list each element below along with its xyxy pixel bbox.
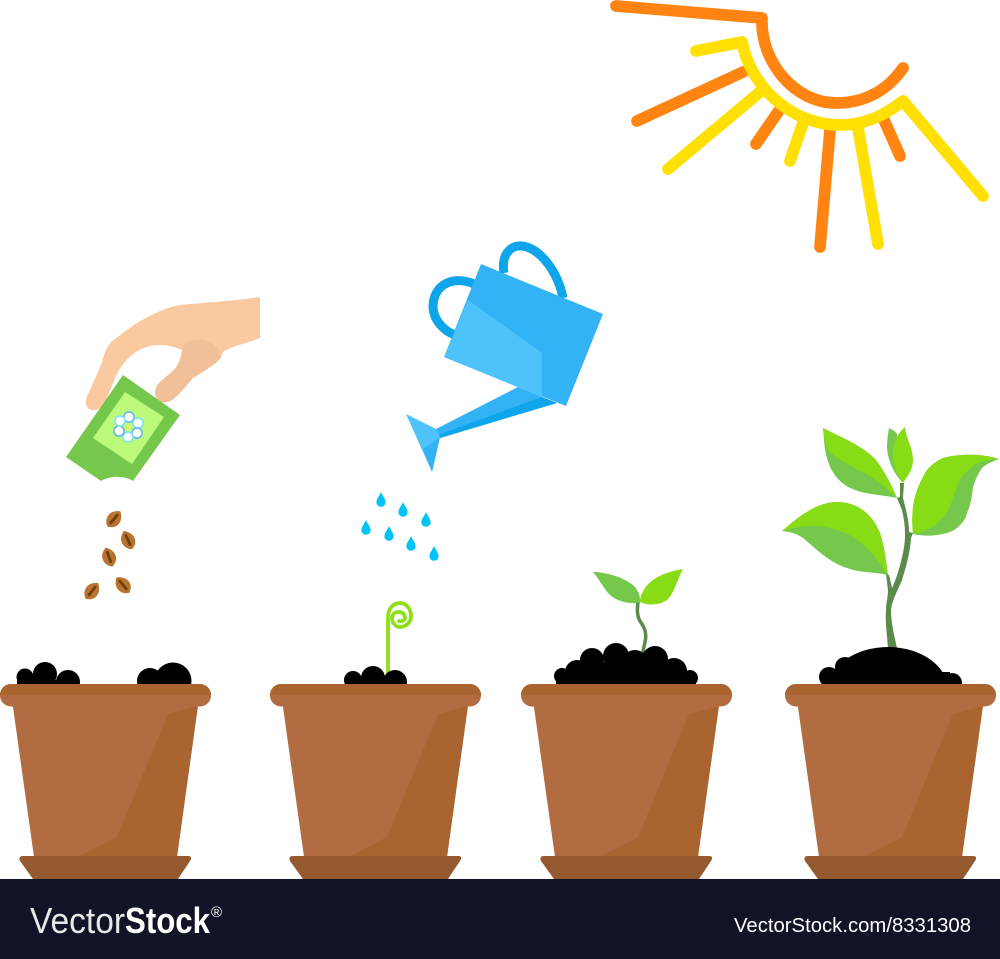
pot 2: sprout [270,603,481,879]
footer image id: VectorStock.com/8331308 [734,915,971,937]
sun: yellow rays and arc [668,42,983,244]
leaf: middle bud [887,427,913,483]
footer bar [0,879,1000,959]
icon: watering can [406,246,603,472]
curled sprout [388,603,411,676]
registered mark: ® [211,904,222,921]
plant stem [886,483,913,648]
spout head [406,414,440,472]
sun: orange rays and arc [616,6,903,247]
falling seeds [81,507,138,603]
seedling stem [637,602,646,656]
sun [616,6,983,247]
pot 3: seedling [521,569,732,879]
soil [16,662,192,700]
leaf: right [912,455,999,536]
leaf: left [782,502,888,575]
hand [86,297,260,410]
icon: hand with seed packet [66,297,260,481]
footer logo: Vector [30,900,125,941]
spout [436,387,557,438]
soil [819,647,962,733]
water drops [361,492,439,561]
thumb shading [155,339,221,402]
pot 1: seeded soil [0,662,211,879]
seed packet [66,375,180,481]
leaf: top left [823,428,897,498]
can body [444,264,603,406]
soil [344,666,407,694]
flower on packet [113,411,144,443]
seedling leaves [593,572,640,603]
pot 4: young plant [782,427,999,879]
can handles [433,246,563,335]
soil [554,643,698,686]
footer logo bold part: Stock [125,900,211,941]
